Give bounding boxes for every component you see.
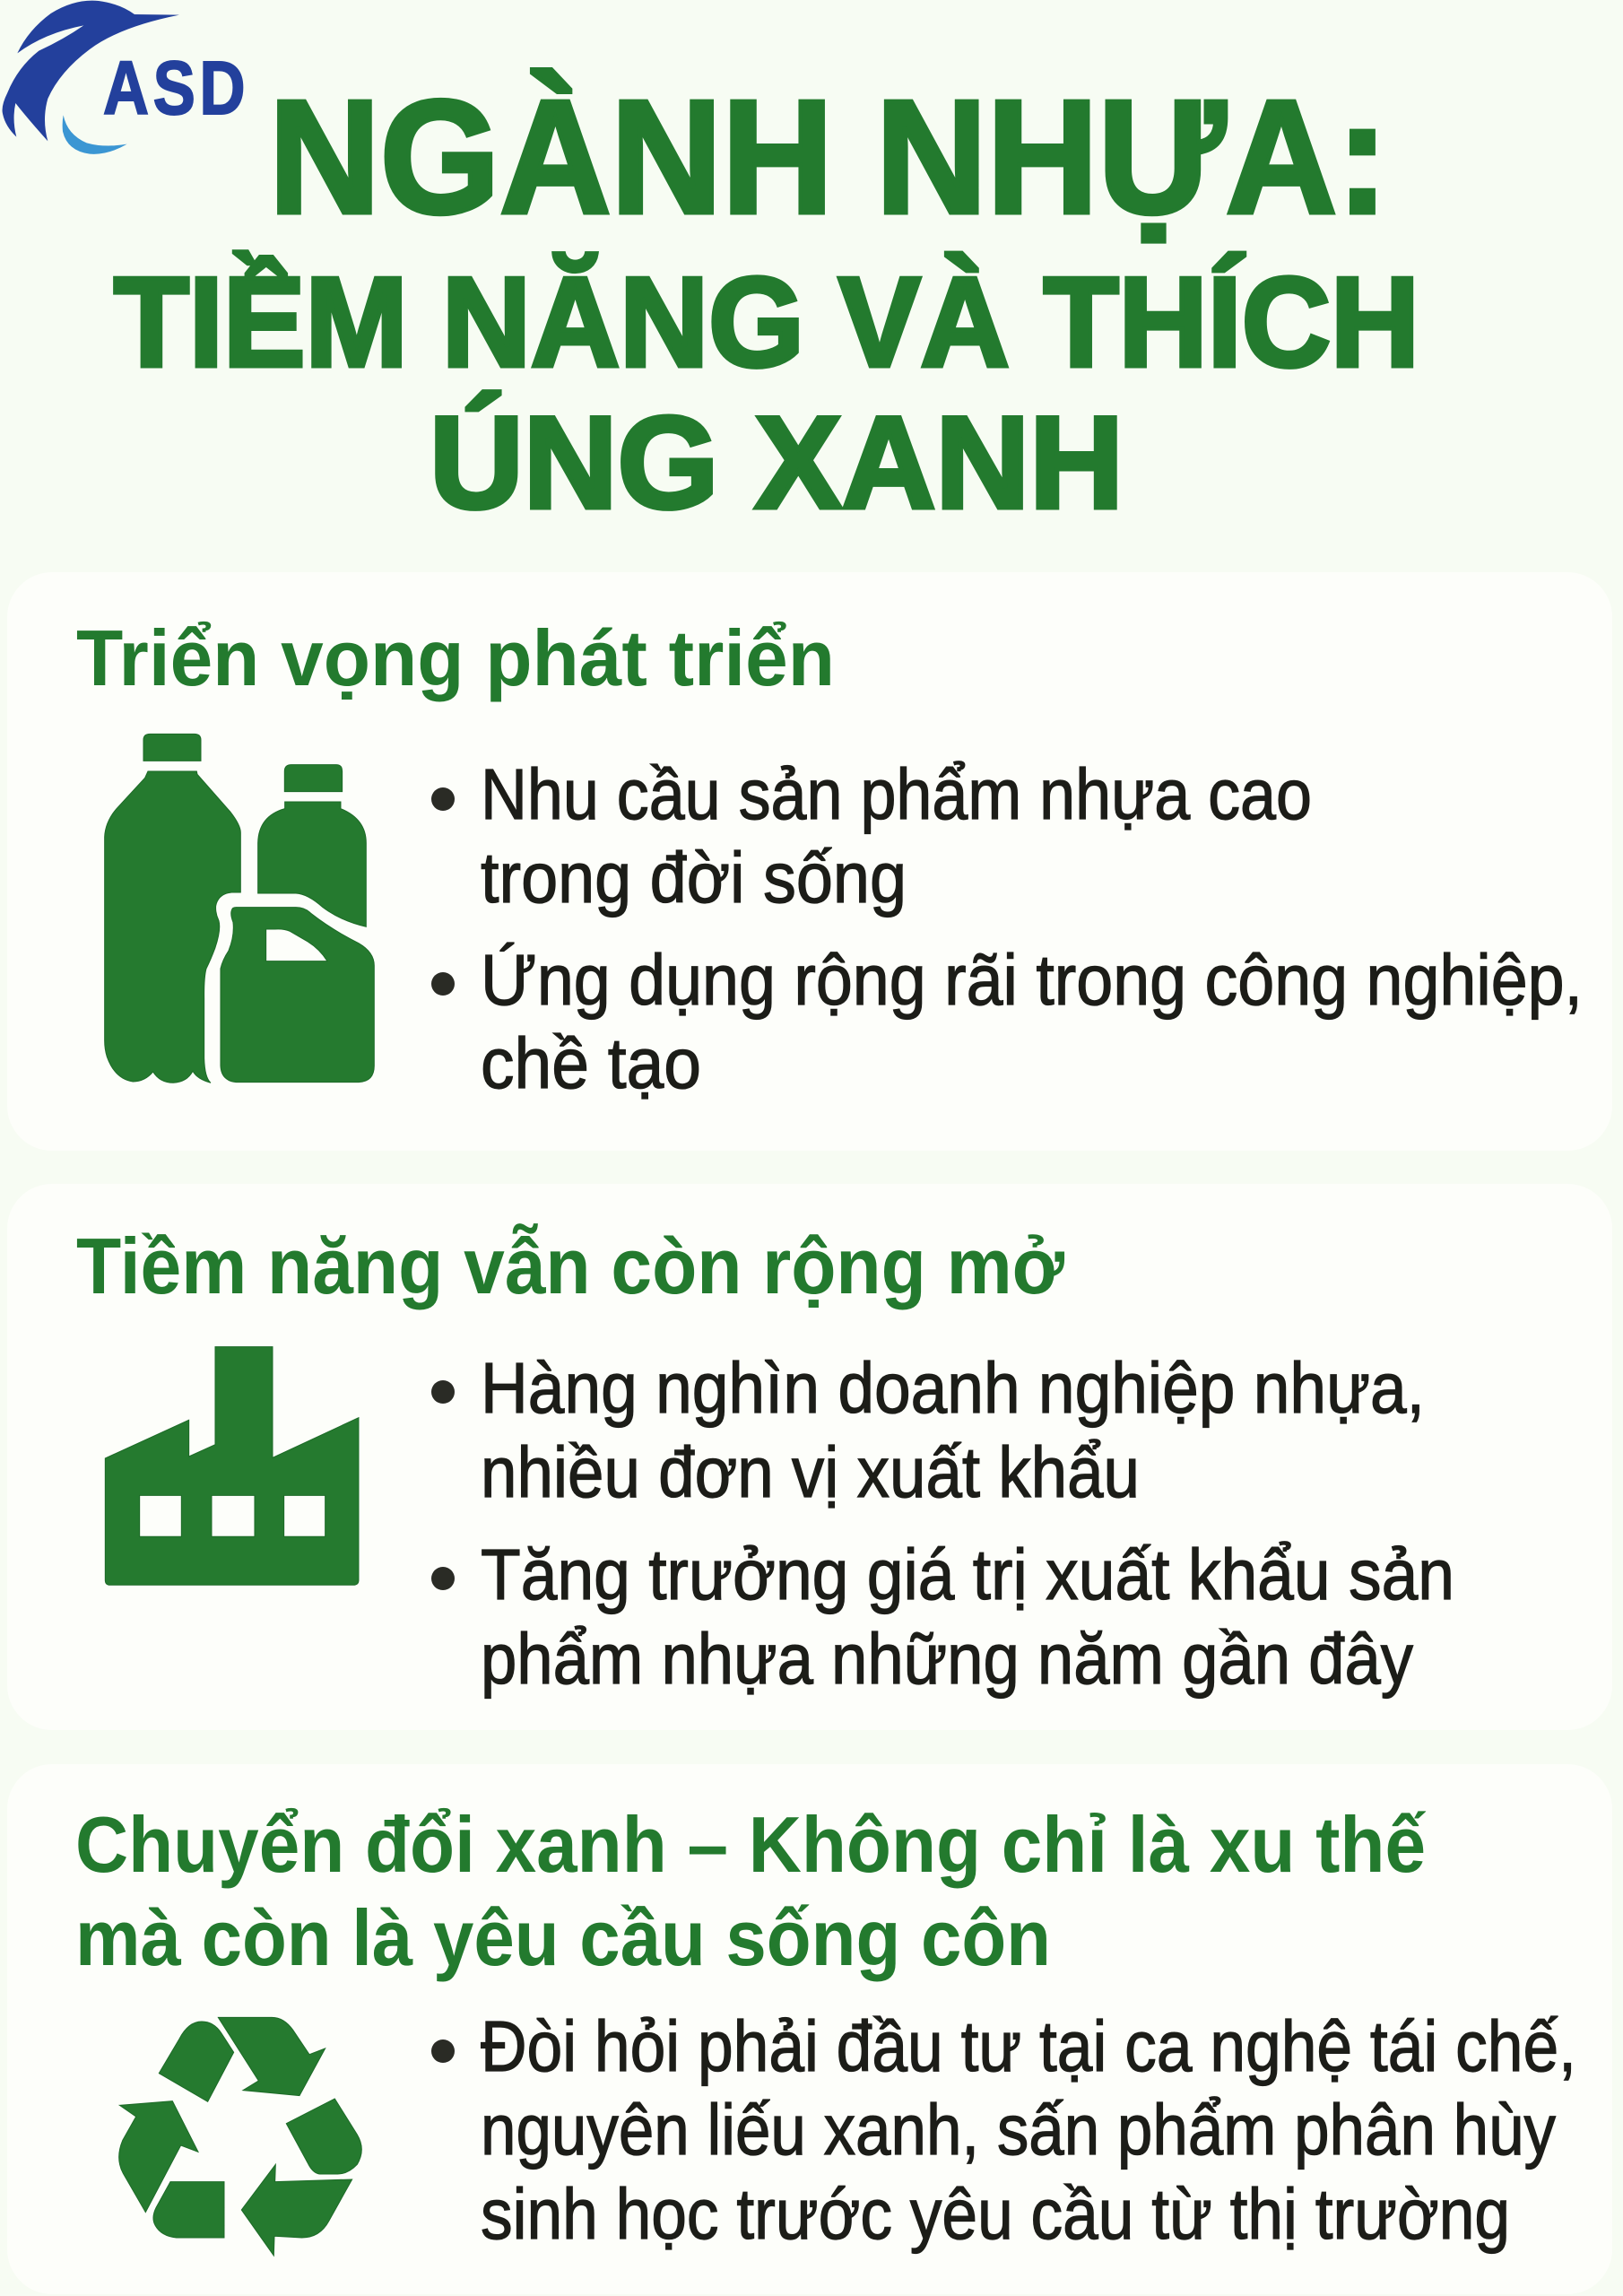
bullet list: Nhu cầu sản phẩm nhựa cao: [481, 754, 1312, 834]
title: ÚNG XANH: [430, 389, 1124, 535]
logo: ASD: ASD: [103, 47, 245, 130]
icon: plastic bottles: [105, 734, 374, 1083]
bullet list: [431, 2006, 1576, 2254]
bullet list: trong đời sống: [481, 838, 907, 918]
icon: recycle: [119, 2017, 361, 2256]
panel: triển vọng phát triển: [7, 572, 1612, 1151]
panel: chuyển đổi xanh: [7, 1764, 1612, 2294]
bullet list: [431, 754, 1583, 1103]
bullet list: sinh học trước yêu cầu từ thị trường: [481, 2174, 1510, 2254]
icon: factory: [105, 1347, 359, 1585]
logo: ASD: [3, 1, 245, 154]
panel: tiềm năng vẫn còn rộng mở: [7, 1184, 1612, 1730]
bullet list: Hàng nghìn doanh nghiệp nhựa,: [481, 1348, 1425, 1428]
heading: triển vọng phát triển: Triển vọng phát triển: [76, 613, 835, 702]
title: [114, 67, 1419, 535]
bullet list: [431, 1348, 1454, 1699]
bullet list: nhiều đơn vị xuất khẩu: [481, 1432, 1140, 1512]
heading: tiềm năng vẫn còn rộng mở: Tiềm năng vẫn còn rộng mở: [76, 1222, 1064, 1310]
title: TIỀM NĂNG VÀ THÍCH: [114, 251, 1419, 394]
title: NGÀNH NHỰA:: [269, 67, 1388, 248]
bullet list: phẩm nhựa những năm gần đây: [481, 1619, 1413, 1699]
bullet list: Tăng trưởng giá trị xuất khẩu sản: [481, 1535, 1454, 1614]
heading: chuyển đổi xanh: Chuyển đổi xanh – Không chỉ là xu thế: [75, 1800, 1427, 1889]
heading: chuyển đổi xanh: mà còn là yêu cầu sống côn: [75, 1893, 1051, 1982]
bullet list: chề tạo: [481, 1023, 701, 1103]
heading: chuyển đổi xanh: [75, 1800, 1427, 1982]
